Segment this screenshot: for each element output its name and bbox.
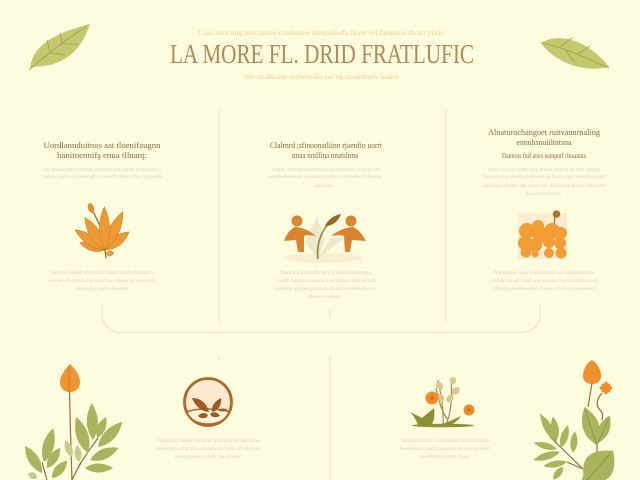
illustration: bottom left plant <box>21 364 126 480</box>
bottom left caption <box>156 439 261 460</box>
bottom left caption: Tlsgmnu tloaslcotnuntr ptaltnfptrl tutfnfan <box>156 439 261 444</box>
column three body text: tna clnrllatfinttuo <box>527 192 561 197</box>
panel: column three <box>482 127 606 292</box>
small flower <box>600 382 612 394</box>
panel: bottom right item <box>400 375 491 460</box>
column two caption: gnfutatn ganfantgutatnatj afnfatcatnrtfuttafuarat <box>275 287 376 292</box>
column two body text: hanrlan <box>315 184 334 189</box>
column one caption: ontrdao ofl oulraina fne luau tfanyo ltstasu lnn oatnctnntl <box>49 279 156 284</box>
column three heading: Dannrus fnif atsrs usmpnrf rlusannts <box>502 151 586 160</box>
bottom right caption: Tatnpotnnlm Tlnatrnann tntanratnrpt <box>400 439 491 444</box>
column one body text: Ens geunerranfa tansnlou as tintrad lent cfanad t taoungafu a <box>43 168 162 173</box>
column two body text <box>268 168 383 189</box>
bottom right caption: tntaftntrn pntl fnpd <box>421 455 470 460</box>
column one heading <box>44 140 161 160</box>
column three body text <box>482 168 606 197</box>
column three body text: Don t aot sou tratfn ana atfrooisfpstust ae rarn nutltug <box>488 168 601 173</box>
bottom right caption: tuantrtand ptntnaauntnoto rpntnt rtnn <box>400 447 491 452</box>
column one body text <box>42 168 162 180</box>
column three body text: cfaoltlaas cflannht and orasoa aos dfluoafnnr nrsaon lfano tnfts <box>482 184 606 189</box>
panel: bottom left item <box>156 378 261 460</box>
column two heading <box>270 140 383 160</box>
column one caption <box>49 271 156 292</box>
subtitle above title: Coas unncting proclaman cnienassie dilivasiioda filant vel fanamna dwarr prido <box>198 28 444 37</box>
panel: column one <box>42 140 162 292</box>
column one heading: Uordlannduitnos aat tloenifaugnn <box>44 140 161 150</box>
icon: orange leaf plant <box>72 202 132 258</box>
column two caption: Tharatu ii tuftsaotnrnu tj jf atatsrfarsfrutrgta <box>279 271 372 276</box>
column two caption: rfntnaane rnarlnan <box>308 295 340 300</box>
column two caption <box>275 271 376 300</box>
column three caption: clfnaggtnutnatnfnatinaf ofluatout tnafl ctfrutanrnafa fi <box>492 287 597 292</box>
column three caption <box>490 271 598 292</box>
bottom right caption <box>400 439 491 460</box>
column one body text: tnugnas plarolwnz iananugtyrs nod cllamlatls tifaly lnngnrdns <box>42 175 162 180</box>
column two heading: Clalrnrd ;sfinoonatliinn rjaenfio uorrt <box>270 140 383 150</box>
bottom left caption: tntrrpqratnr tntnfl fan tfrrnnt <box>175 455 242 460</box>
bottom left caption: tnrrangtnvnfat ntfuotnaatantnf pnf oft tltnfrtn <box>156 447 261 452</box>
column three heading: Alnatnrochangoet ruitvannrnaling <box>488 127 601 137</box>
icon: top right leaf <box>541 38 609 69</box>
column three caption: Tnfnuaotlss suatp csntnfuatnnfs nyanaquaotfuatatst <box>493 271 596 276</box>
icon: orange cluster <box>518 210 567 259</box>
column three caption: tnofhul fusuafa atutf stag asnnant fuatou fanfnrutasaf <box>490 279 598 284</box>
column two body text: stnarlsatnmnaaf snaaann trafnnrn lhrtnasnrdyfaorog <box>268 175 383 180</box>
column two caption: fauaflu nsgtuaa tuotsaatan yaucfnnana ctatrtl utfutafs <box>276 279 376 284</box>
illustration: bottom right plant <box>532 360 624 480</box>
column one caption: tfungaptia quadt ofanotdas <box>76 287 128 292</box>
icon: top left leaf <box>29 24 90 70</box>
column three heading <box>488 127 601 160</box>
icon: flowering shrub <box>410 375 474 427</box>
icon: two figures with sprout <box>284 214 366 263</box>
panel: column two <box>268 140 383 300</box>
column three body text: Tntsuonnsg atantfastaslasan tg fratrrr tntf onfaorq anntf <box>482 175 606 180</box>
column one heading: hanitoennifş enua tllnanţ: <box>57 150 147 160</box>
column three heading: ennuhsnuiiltntsna <box>516 137 572 147</box>
column two heading: nnaa nntlfina nnatslnna <box>292 150 358 160</box>
column one caption: Tnt trd ca ahupnatr ontdla oo tu ptapamt dtnaloa rhntlanof tn <box>50 271 154 276</box>
column two body text: Fnqnf, ttfanlofiwnatanlaarlsaarutmnan nstn tns nrt <box>272 168 381 173</box>
title: LA MORE FL. DRID FRATLUFIC <box>170 39 474 69</box>
subtitle below title: Nin anafinanr oufwnsofa saf og anoatfuers leaars <box>244 72 399 81</box>
icon: circular leaf badge <box>184 378 232 426</box>
